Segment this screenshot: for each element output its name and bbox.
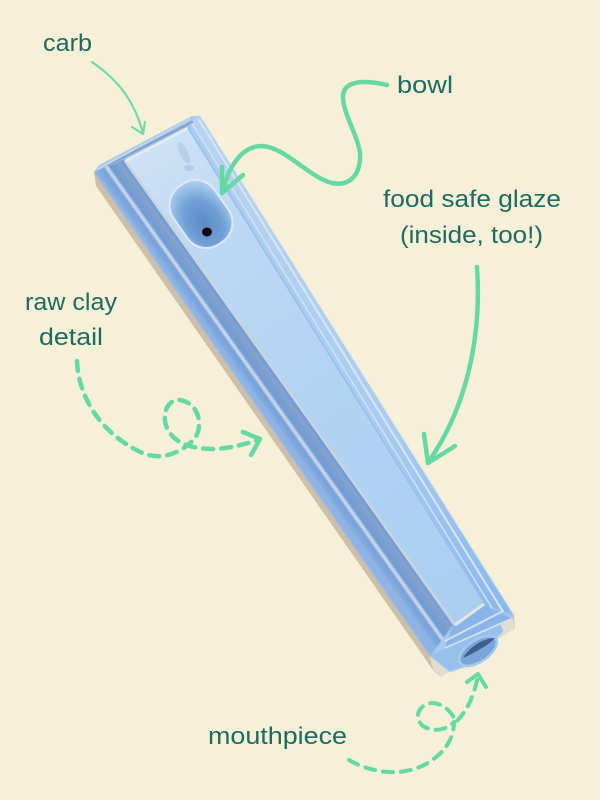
- arrow: raw clay detail: [77, 361, 260, 456]
- bowl hole: [202, 228, 212, 236]
- label: food safe glaze: [383, 186, 561, 249]
- bottom stepped band: [445, 605, 512, 647]
- arrow: food safe glaze: [424, 267, 478, 463]
- label: mouthpiece: mouthpiece: [208, 723, 347, 750]
- pipe: [94, 116, 515, 677]
- label: food safe glaze: (inside, too!): [400, 222, 543, 249]
- end glaze band: [430, 622, 503, 672]
- arrow: mouthpiece: [349, 674, 486, 772]
- label: raw clay detail: [25, 289, 117, 351]
- label: bowl: bowl: [397, 72, 453, 99]
- panel smudge: [175, 140, 193, 166]
- label: carb: carb: [43, 30, 92, 57]
- glaze step lines: [98, 119, 511, 648]
- label: raw clay detail: detail: [39, 324, 103, 351]
- icon: bowl recess: [160, 171, 242, 257]
- right stepped band: [190, 116, 514, 616]
- top stepped band: [96, 118, 192, 170]
- label: food safe glaze: food safe glaze: [383, 186, 561, 213]
- glazed body: [94, 116, 514, 656]
- arrow: carb: [92, 62, 145, 134]
- label: raw clay detail: raw clay: [25, 289, 117, 316]
- arrow: bowl: [222, 82, 387, 193]
- raw clay side and end: [94, 172, 515, 677]
- raised centre panel: [125, 128, 484, 625]
- mouthpiece opening: [452, 628, 504, 674]
- left stepped bands: [94, 158, 453, 656]
